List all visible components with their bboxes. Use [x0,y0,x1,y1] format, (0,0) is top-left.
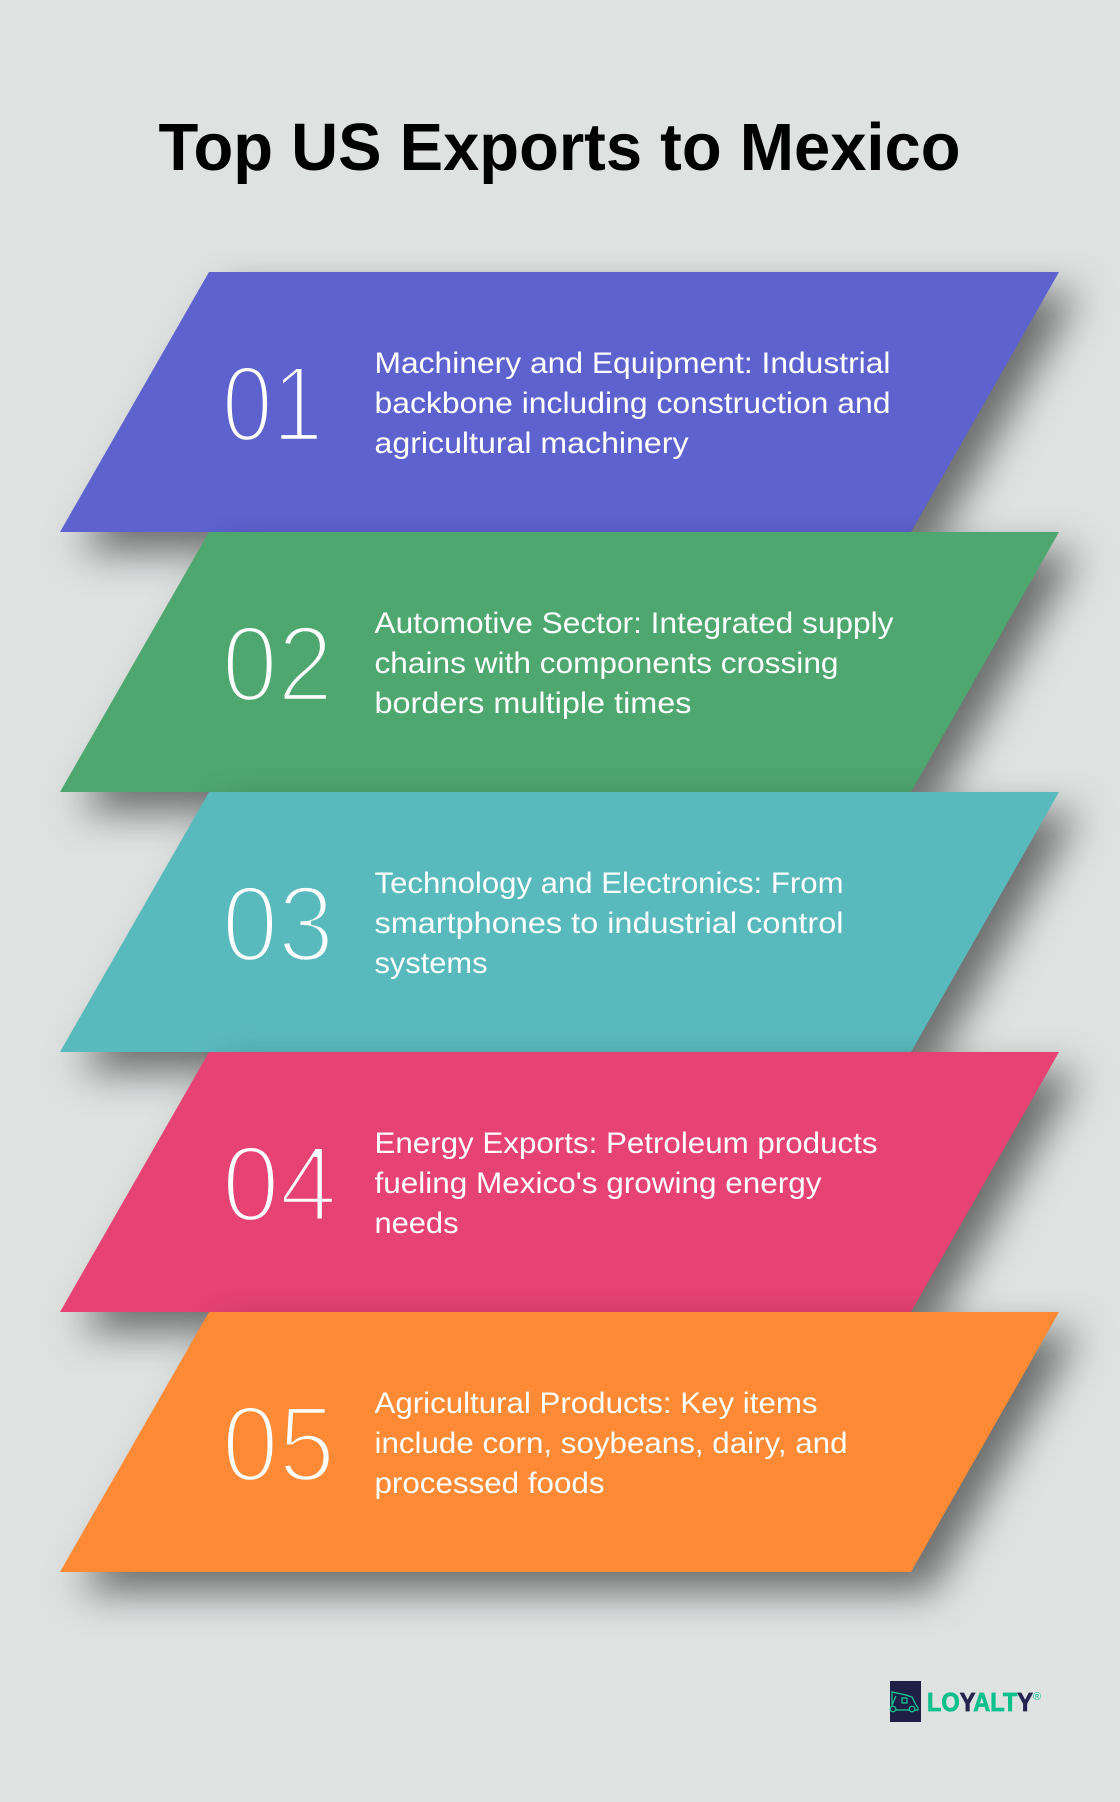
text: energy exports: fueling Mexico's growing energy [374,1167,822,1200]
number 04: 04 [222,1123,337,1244]
text: agricultural products: processed foods [374,1467,604,1500]
panel: 05 agricultural products [60,1312,1079,1592]
text: agricultural products: Agricultural Products: Key items [374,1387,818,1420]
number 03: 03 [222,863,334,984]
number 01: 01 [222,343,323,464]
text: automotive sector: chains with components crossing [374,647,838,680]
text: machinery and equipment: Machinery and Equipment: Industrial [374,347,890,380]
icon: truck on navy square [890,1681,921,1722]
logo: Loyalty [890,1681,1041,1722]
text: automotive sector: Automotive Sector: Integrated supply [374,607,894,640]
text: energy exports: Energy Exports: Petroleum products [374,1127,878,1160]
text: agricultural products: include corn, soybeans, dairy, and [374,1427,848,1460]
text: automotive sector: borders multiple times [374,687,692,720]
text: machinery and equipment: backbone including construction and [374,387,890,420]
text: technology and electronics: systems [374,947,488,980]
panel: 04 energy exports [60,1052,1079,1332]
title: Top US Exports to Mexico [158,110,960,185]
number 05: 05 [222,1383,335,1504]
panel: 01 machinery and equipment [60,272,1079,552]
text: technology and electronics: smartphones to industrial control [374,907,844,940]
panel: 02 automotive sector [60,532,1079,812]
number 02: 02 [222,603,333,724]
text: energy exports: needs [374,1207,458,1240]
panel: 03 technology and electronics [60,792,1079,1072]
registered mark: ® [1033,1691,1041,1703]
wordmark: LOYALTY [927,1687,1033,1717]
text: technology and electronics: Technology and Electronics: From [374,867,844,900]
text: machinery and equipment: agricultural machinery [374,427,689,460]
